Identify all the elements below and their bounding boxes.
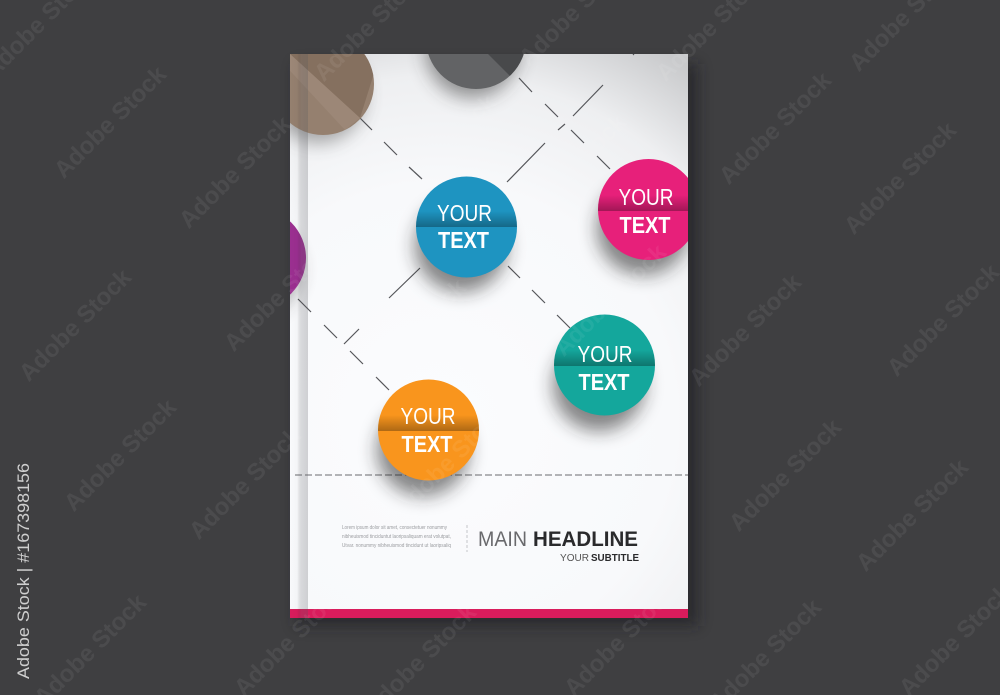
watermarks: Adobe Stock (684, 268, 807, 392)
main headline (480, 532, 638, 546)
circle: orange: YOUR (400, 403, 456, 429)
body text: Lorem ipsum dolor sit amet, consectetuer nonummy (342, 525, 447, 531)
circle: orange: TEXT (402, 431, 452, 457)
subtitle (560, 554, 639, 561)
book cover (290, 54, 688, 618)
watermarks: Adobe Stock (14, 263, 137, 387)
main headline: HEADLINE (533, 528, 638, 551)
circle: teal (553, 314, 655, 431)
watermarks: Adobe Stock (714, 66, 837, 190)
spine shading (298, 54, 308, 618)
circle: orange (377, 380, 479, 496)
watermarks: Adobe Stock (49, 60, 172, 184)
vertical divider (466, 525, 468, 552)
circle: blue: TEXT (438, 227, 489, 253)
divider dashed line (295, 474, 688, 476)
watermarks: Adobe Stock (549, 238, 672, 362)
circle: pink (597, 159, 699, 275)
circle: pink: TEXT (620, 212, 670, 238)
watermarks: Adobe Stock (724, 413, 847, 537)
circle: blue (415, 176, 517, 292)
body text (342, 525, 451, 549)
circle: blue: YOUR (437, 200, 492, 226)
watermarks: Adobe Stock (184, 421, 307, 545)
dashed connector lines (298, 54, 634, 390)
subtitle: SUBTITLE (591, 552, 639, 564)
body text: Utvar. nonummy nibheuismod tincidunt ut laoripsaliq (342, 543, 451, 549)
pink footer bar (290, 609, 688, 618)
book shadow (296, 64, 698, 626)
watermarks: Adobe Stock (174, 110, 297, 234)
watermarks: Adobe Stock (349, 273, 472, 397)
circle: gray (415, 54, 529, 109)
watermarks: Adobe Stock (389, 398, 512, 522)
watermarks: Adobe Stock (839, 116, 962, 240)
circle: pink: YOUR (618, 184, 674, 210)
watermarks: Adobe Stock (509, 108, 632, 232)
circle: teal: TEXT (578, 369, 630, 395)
watermarks: Adobe Stock (851, 453, 974, 577)
circle: purple (290, 221, 310, 312)
watermarks: Adobe Stock (379, 88, 502, 212)
circle: teal: YOUR (578, 341, 632, 367)
body text: nibheuismod tinciduntut laoripsaliquam erat volutpat, (342, 534, 451, 540)
subtitle: YOUR (560, 552, 589, 564)
watermarks: Adobe Stock (219, 233, 342, 357)
main headline: MAIN (478, 528, 527, 551)
circle: brown (290, 54, 375, 153)
page background (290, 54, 688, 618)
watermarks: Adobe Stock (59, 393, 182, 517)
side stock credit: Adobe Stock | #167398156 (14, 463, 33, 679)
